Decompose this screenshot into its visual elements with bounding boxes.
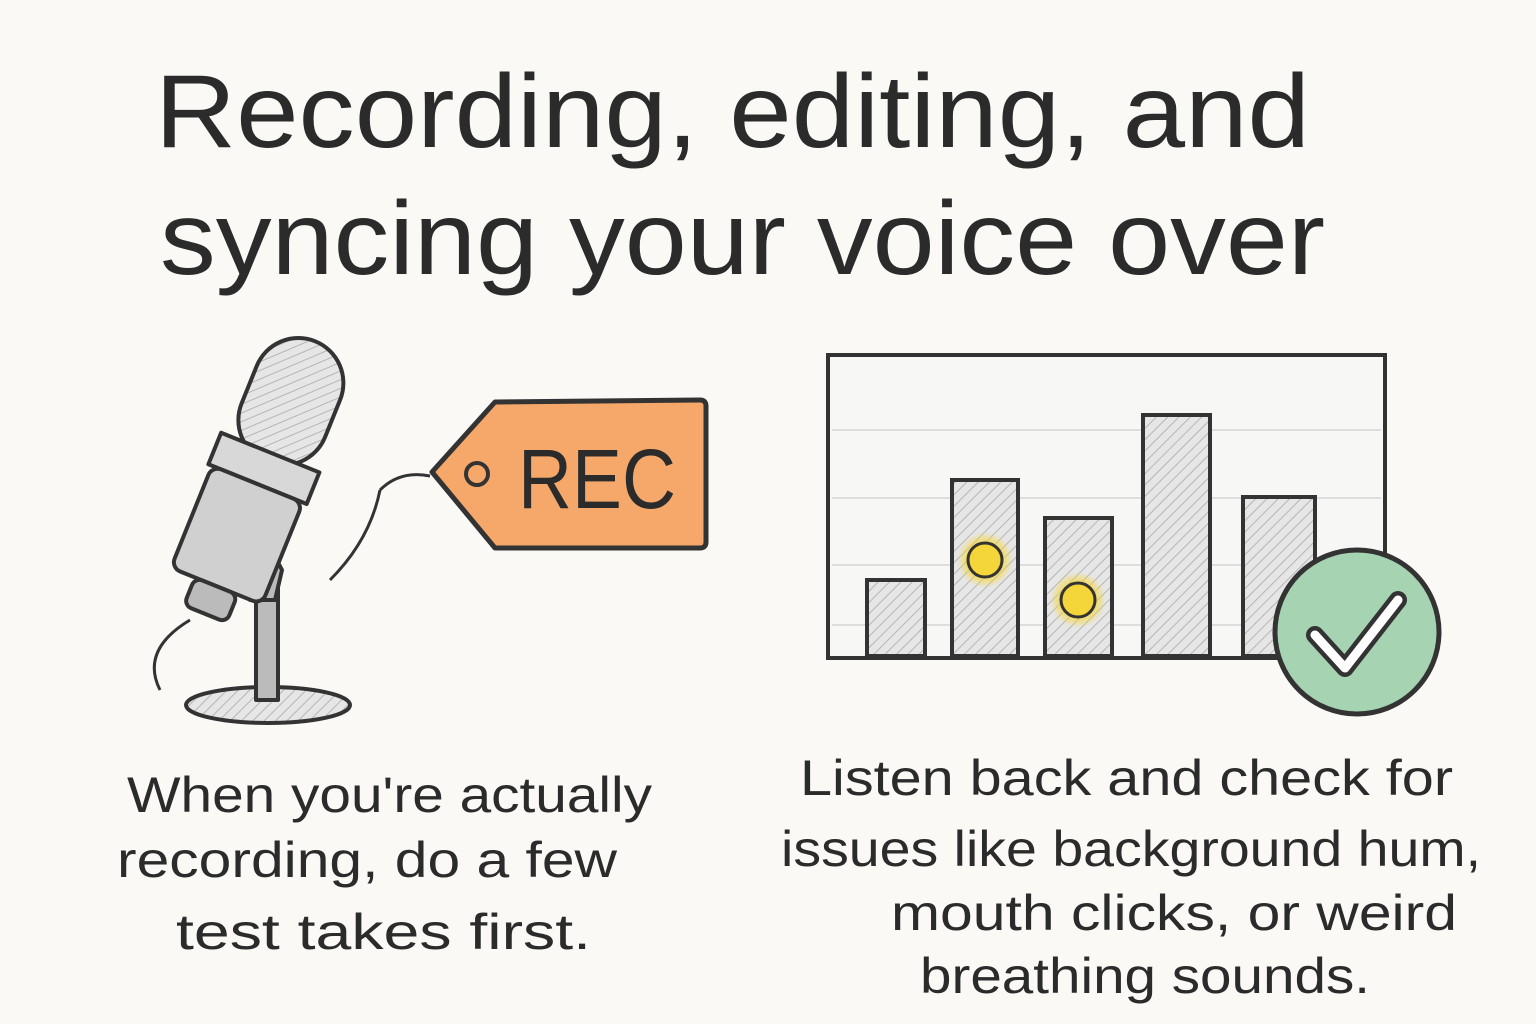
highlight dots [957,532,1106,628]
text: right caption: mouth clicks, or weird [891,885,1457,941]
text: right caption [781,750,1481,1004]
text: left caption: recording, do a few [117,832,618,888]
text: right caption: breathing sounds. [920,948,1370,1004]
text: right caption: Listen back and check for [800,750,1453,806]
text: left caption [117,767,652,960]
title: syncing your voice over [160,181,1325,297]
text: left caption: test takes first. [176,904,591,960]
title [155,54,1325,297]
bar chart [828,355,1385,658]
icon: microphone [154,321,364,723]
icon: REC tag: REC [518,432,676,526]
text: right caption: issues like background hum, [781,821,1481,877]
title: Recording, editing, and [155,54,1310,170]
text: left caption: When you're actually [127,767,652,823]
icon: REC tag [330,400,706,580]
icon: check circle [1275,550,1439,714]
